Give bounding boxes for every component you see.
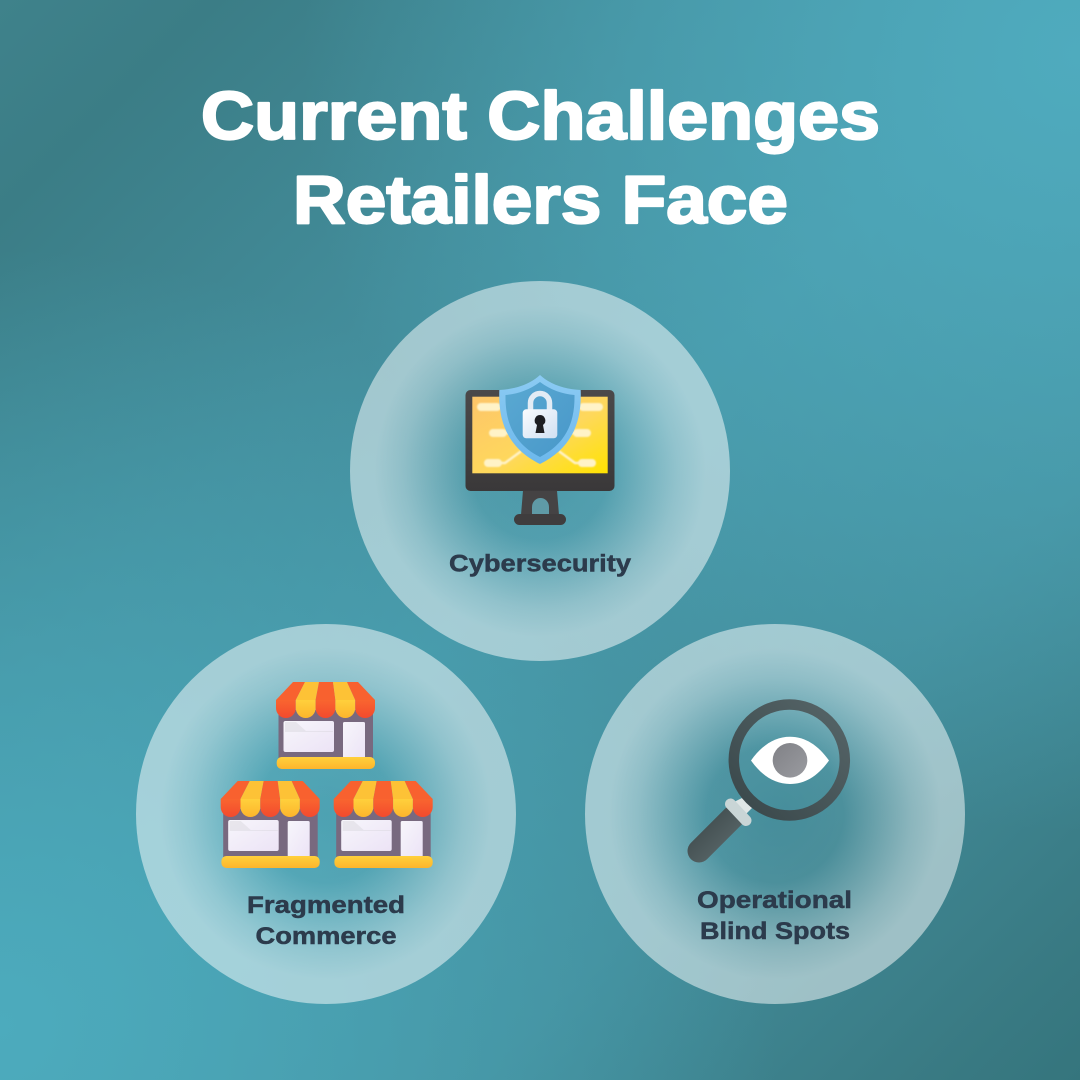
icon: three storefronts	[221, 682, 433, 868]
label: Cybersecurity: Cybersecurity	[449, 550, 632, 578]
panel: operational blind spots	[585, 624, 965, 1004]
panel: cybersecurity	[350, 281, 730, 661]
title: Current Challenges	[201, 78, 880, 154]
icon: monitor with security shield	[466, 375, 614, 525]
label: Fragmented Commerce: Fragmented	[247, 892, 405, 919]
title: Retailers Face	[293, 162, 788, 238]
icon: magnifying glass with eye	[699, 704, 845, 851]
label: Fragmented Commerce: Commerce	[256, 923, 396, 950]
panel: fragmented commerce	[136, 624, 516, 1004]
label: Fragmented Commerce	[247, 892, 405, 950]
label: Operational Blind Spots: Blind Spots	[700, 918, 850, 945]
title	[201, 78, 880, 238]
label: Operational Blind Spots	[697, 887, 852, 945]
label: Operational Blind Spots: Operational	[697, 887, 852, 914]
